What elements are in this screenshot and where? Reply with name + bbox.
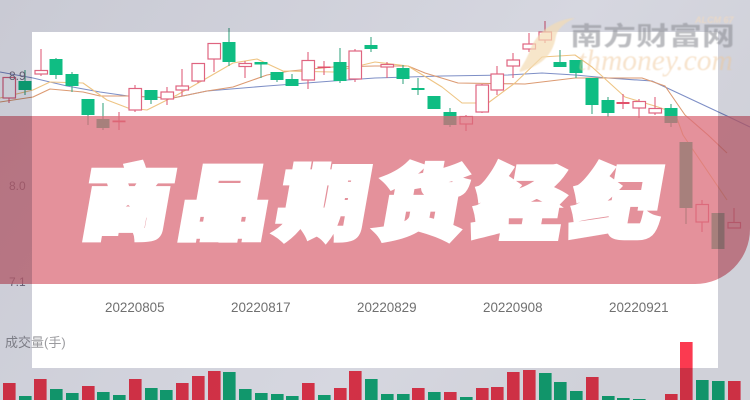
- volume label: 成交量(手): [5, 335, 66, 350]
- doji candle bars: [112, 66, 630, 122]
- hollow red candle bodies: [3, 32, 740, 228]
- title: 商品期货经纪: [75, 140, 673, 256]
- green candle bodies: [18, 42, 724, 249]
- date axis labels: [105, 300, 669, 315]
- pink title band: [0, 116, 750, 284]
- red volume bars: [3, 342, 741, 400]
- date axis labels: 20220817: [231, 300, 291, 315]
- date axis labels: 20220921: [609, 300, 669, 315]
- watermark small code: ALCM 67: [694, 15, 734, 25]
- price axis labels: 7.1: [9, 275, 26, 289]
- date axis labels: 20220829: [357, 300, 417, 315]
- watermark chinese name: 南方财富网: [570, 22, 735, 51]
- watermark swoosh: [520, 18, 575, 72]
- price axis labels: 8.0: [9, 179, 26, 193]
- price axis labels: [9, 69, 26, 289]
- candle wicks: green: [25, 28, 718, 249]
- candlestick chart: [0, 21, 750, 249]
- moving average lines: [0, 55, 750, 200]
- date axis labels: 20220908: [483, 300, 543, 315]
- watermark url: thmoney.com: [578, 45, 733, 77]
- watermark logo: [520, 15, 735, 77]
- date axis labels: 20220805: [105, 300, 165, 315]
- price axis labels: 8.9: [9, 69, 26, 83]
- candle wicks: red: [9, 21, 734, 232]
- green volume bars: [19, 372, 725, 400]
- volume bars: [3, 342, 741, 400]
